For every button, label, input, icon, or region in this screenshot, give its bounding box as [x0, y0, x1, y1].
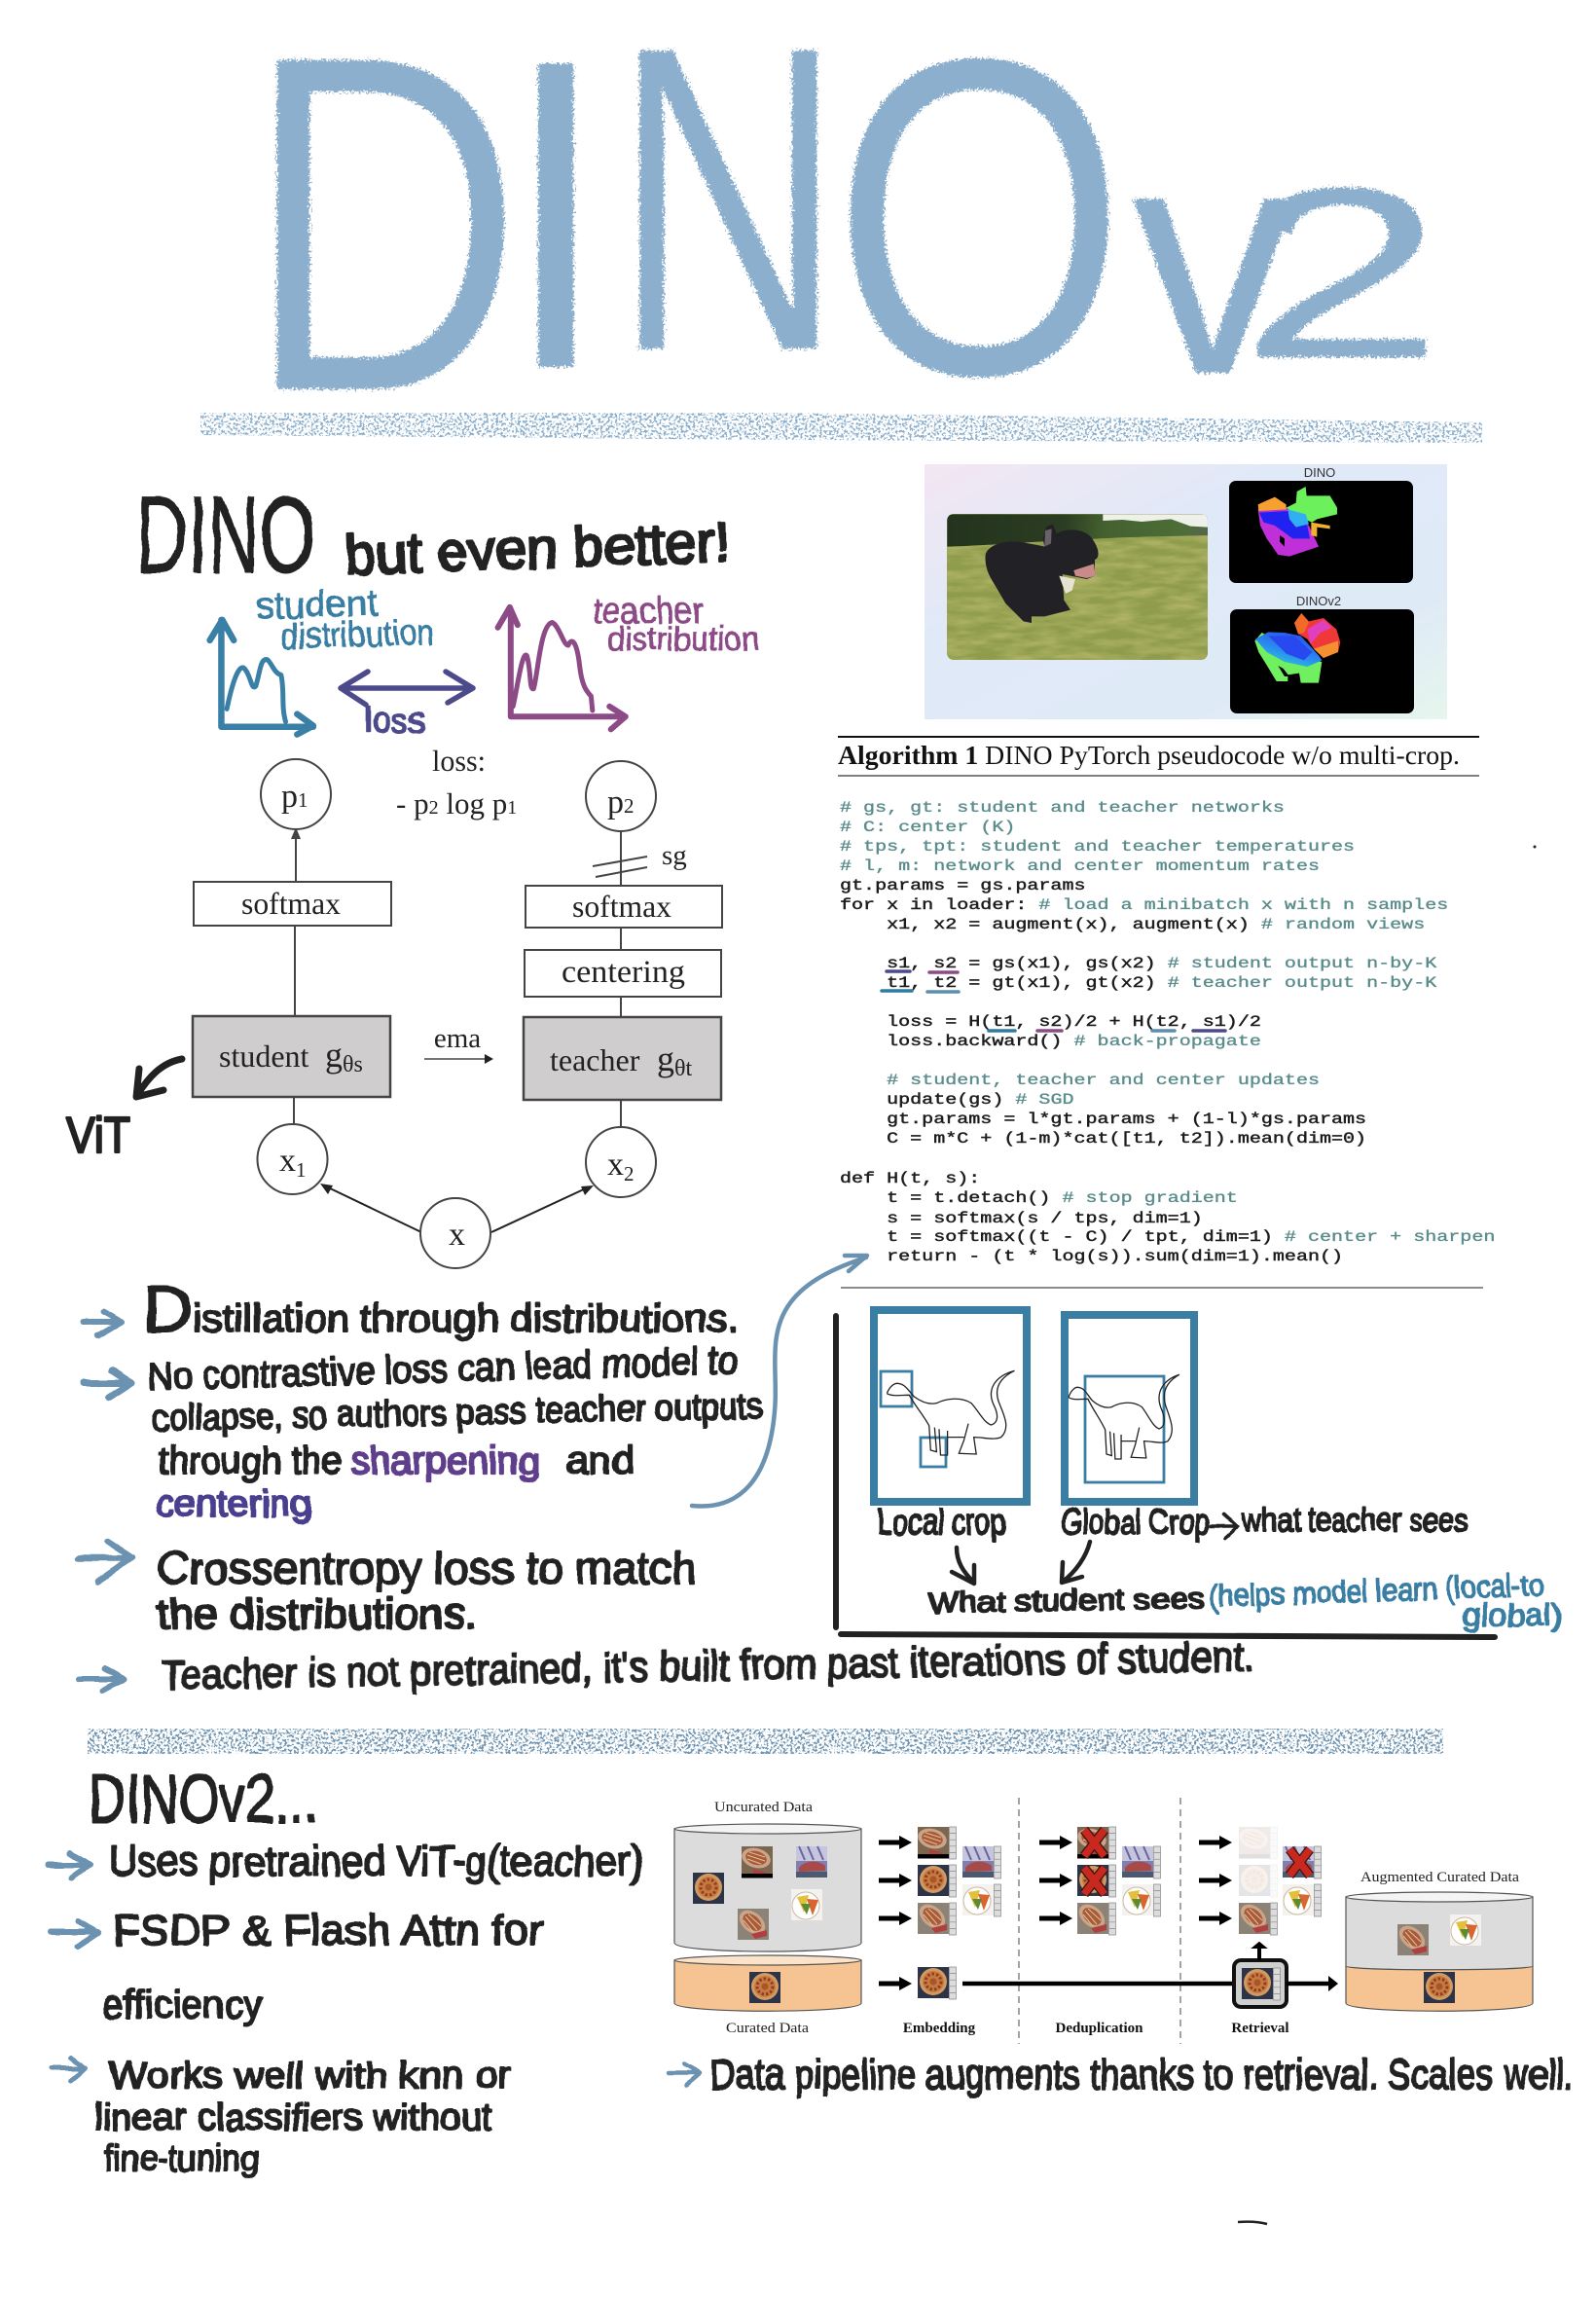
note: FSDP and Flash Attn: FSDP & Flash Attn for [113, 1907, 543, 1954]
note 2: and [565, 1440, 635, 1482]
pseudocode block: s = softmax(s / tps, dim=1) [840, 1211, 1203, 1227]
x2 node: 2 [624, 1162, 635, 1185]
divider lines [1019, 1798, 1180, 2044]
pseudocode block: t1, t2 = gt(x1), gt(x2) # teacher output n-by-K [840, 975, 1436, 992]
sg label: sg [662, 840, 687, 871]
note: FSDP and Flash Attn: efficiency [102, 1984, 263, 2026]
note 2: collapse, so authors pass teacher outputs [152, 1386, 764, 1440]
heading: DINO but even better [136, 474, 731, 596]
student network: student [219, 1039, 309, 1074]
teacher network [524, 1017, 721, 1100]
pseudocode block [840, 800, 1495, 1265]
pseudocode block: loss.backward() # back-propagate [840, 1034, 1261, 1050]
step: embedding [879, 1825, 1000, 2036]
note: knn and linear classifiers: fine-tuning [104, 2138, 259, 2179]
ViT annotation: ViT [66, 1108, 130, 1164]
softmax student [194, 882, 391, 926]
uncurated data store [674, 1800, 861, 1951]
pseudocode block: t = softmax((t - C) / tpt, dim=1) # center + sharpen [840, 1229, 1495, 1246]
crop captions: Global Crop [1061, 1502, 1210, 1542]
local crop frame [874, 1310, 1027, 1502]
chart: teacher distribution: distribution [607, 621, 759, 658]
softmax student: softmax [241, 886, 341, 921]
photo: running dog [947, 514, 1208, 660]
heading: DINO but even better: but even better! [344, 510, 731, 587]
chart: teacher distribution [498, 591, 759, 729]
global crop frame [1065, 1315, 1194, 1502]
curated data store [674, 1955, 861, 2036]
crop captions [877, 1502, 1562, 1632]
softmax teacher [526, 886, 722, 928]
crop captions: what teacher sees [1241, 1502, 1468, 1539]
note: FSDP and Flash Attn [50, 1907, 543, 2026]
panel: local and global crops [836, 1310, 1562, 1637]
p1 node: p [281, 779, 298, 815]
note: knn and linear classifiers [52, 2056, 511, 2179]
x1 node: x [279, 1143, 296, 1179]
note 3: Crossentropy loss to match [157, 1543, 697, 1593]
ViT annotation [66, 1059, 182, 1164]
arrows to student caption [952, 1542, 1090, 1584]
pseudocode block: C = m*C + (1-m)*cat([t1, t2]).mean(dim=0) [840, 1131, 1366, 1148]
heading and notes: DINOv2 [48, 1761, 643, 2179]
title: DINOv2 [243, 0, 1444, 494]
x node: x [449, 1217, 465, 1253]
centering box [525, 950, 721, 997]
note 2: through the [159, 1440, 342, 1482]
feature map: DINO [1229, 481, 1413, 583]
x1 node: 1 [296, 1158, 306, 1182]
ema arrow: ema [434, 1023, 481, 1054]
crop captions: What student sees [927, 1583, 1205, 1620]
diagram: data pipeline [674, 1798, 1533, 2044]
title: DINOv2: v [1132, 75, 1295, 443]
crop captions: (helps model learn (local-to [1209, 1567, 1544, 1614]
p1 node [261, 759, 331, 829]
loss formula [396, 744, 517, 820]
step: deduplication: Deduplication [1055, 2021, 1143, 2036]
step: embedding: Embedding [903, 2021, 976, 2036]
centering box: centering [562, 955, 685, 990]
pseudocode block: s1, s2 = gs(x1), gs(x2) # student output n-by-K [840, 956, 1436, 972]
pseudocode block: # gs, gt: student and teacher networks [840, 800, 1285, 817]
label: DINOv2: DINOv2 [1296, 594, 1341, 608]
note 2: No contrastive loss can lead model to [147, 1339, 739, 1399]
augmented curated data store: Augmented Curated Data [1360, 1870, 1519, 1885]
title: DINOv2: 2 [1239, 138, 1444, 410]
pseudocode block: x1, x2 = augment(x), augment(x) # random views [840, 917, 1425, 933]
pseudocode block: # C: center (K) [840, 820, 1015, 836]
heading and notes: DINOv2: DINOv2... [89, 1761, 318, 1837]
pseudocode block: return - (t * log(s)).sum(dim=1).mean() [840, 1249, 1343, 1265]
chart: student distribution: student [255, 583, 379, 628]
p1 node: 1 [298, 788, 308, 812]
pseudocode block: gt.params = gs.params [840, 878, 1086, 894]
diagram: DINO student teacher architecture [193, 744, 722, 1268]
x node [420, 1198, 490, 1268]
ema arrow [424, 1023, 493, 1064]
arrow: loss between distributions: loss [364, 700, 425, 740]
loss formula: loss: [432, 744, 486, 778]
loss formula: - p2 log p1 [396, 786, 517, 820]
note: pretrained teacher: Uses pretrained ViT-g(teacher) [109, 1838, 643, 1885]
uncurated data store: Uncurated Data [714, 1800, 813, 1815]
heading: DINO but even better: DINO [136, 474, 315, 596]
p2 node: p2 [607, 784, 635, 820]
teacher network: θt [674, 1056, 692, 1081]
crop captions: global) [1463, 1597, 1562, 1632]
student network: θs [343, 1052, 363, 1077]
pseudocode block: gt.params = l*gt.params + (1-l)*gs.params [840, 1112, 1366, 1128]
note: knn and linear classifiers: Works well with knn or [109, 2056, 511, 2096]
step: deduplication [1039, 1825, 1160, 2036]
softmax teacher: softmax [572, 889, 671, 924]
x2 node [586, 1127, 656, 1197]
algorithm heading: Algorithm 1 DINO PyTorch pseudocode w/o multi-crop. [838, 741, 1460, 770]
teacher network: g [657, 1039, 674, 1078]
pseudocode block: t = t.detach() # stop gradient [840, 1190, 1238, 1207]
p2 node [586, 761, 656, 831]
label: DINO: DINO [1304, 465, 1335, 480]
crop captions: Local crop [877, 1502, 1006, 1542]
pseudocode block: # student, teacher and center updates [840, 1073, 1320, 1089]
arrow: loss between distributions [341, 672, 473, 740]
pseudocode block: # tps, tpt: student and teacher temperatures [840, 839, 1355, 856]
pseudocode block: def H(t, s): [840, 1171, 980, 1187]
feature map: DINOv2 [1230, 609, 1414, 713]
chart: student distribution [210, 583, 435, 735]
x2 node: x [607, 1147, 624, 1183]
note 2 [83, 1339, 764, 1525]
pseudocode block: loss = H(t1, s2)/2 + H(t2, s1)/2 [840, 1014, 1261, 1031]
code underlines [882, 971, 1225, 1031]
student network [193, 1016, 390, 1097]
note 1: Distillation through distributions. [143, 1272, 739, 1346]
notes: DINO key points [78, 1272, 1254, 1699]
teacher network: teacher [550, 1042, 640, 1077]
pseudocode block: for x in loader: # load a minibatch x with n samples [840, 897, 1448, 914]
student network: g [325, 1036, 343, 1075]
curved arrow: sharpening note to code [692, 1256, 867, 1507]
pseudocode block: # l, m: network and center momentum rates [840, 858, 1320, 875]
note 3 [78, 1541, 697, 1638]
chart: student distribution: distribution [280, 612, 435, 658]
note 4: Teacher is not pretrained, it's built from past iterations of student. [161, 1632, 1254, 1699]
pseudocode block: update(gs) # SGD [840, 1092, 1073, 1109]
note: knn and linear classifiers: linear classifiers without [94, 2097, 492, 2138]
image panel: dog with DINO and DINOv2 feature maps [925, 464, 1447, 719]
step: retrieval: Retrieval [1231, 2021, 1289, 2036]
x1 node [257, 1124, 327, 1194]
note 3: the distributions. [157, 1590, 478, 1638]
curated data store: Curated Data [726, 2021, 809, 2036]
augmented curated data store [1346, 1870, 1533, 2011]
note 2: centering [156, 1482, 311, 1525]
chart: teacher distribution: teacher [593, 591, 704, 632]
connecting line [962, 1982, 1234, 1986]
step: retrieval [1199, 1825, 1338, 2036]
note 2: sharpening [350, 1440, 540, 1482]
